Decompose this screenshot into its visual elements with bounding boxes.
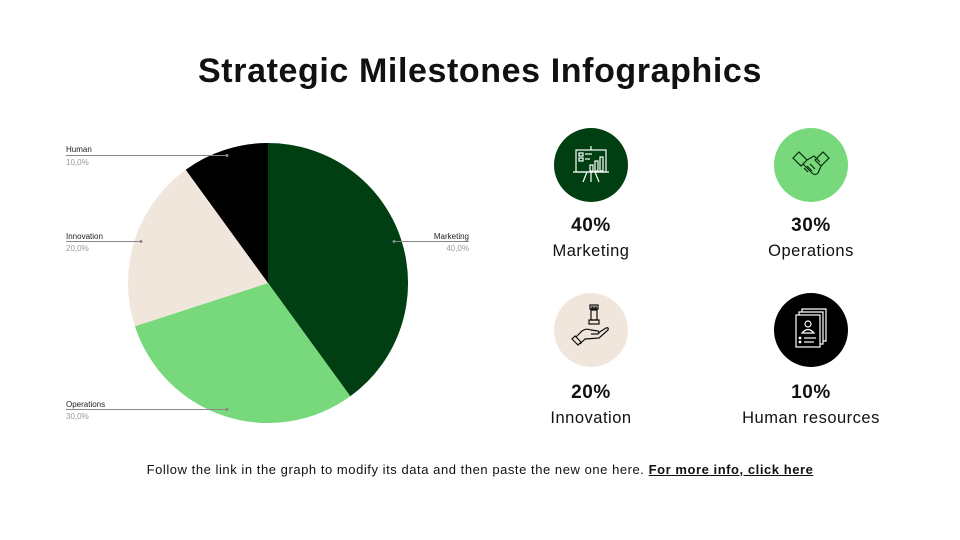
stat: operations: Operations (768, 242, 854, 260)
label: marketing: Marketing (434, 232, 469, 241)
stat: operations (768, 215, 854, 260)
label: human: 10,0% (66, 158, 89, 167)
slice: innovation (128, 170, 268, 326)
stat: human resources (742, 382, 880, 427)
footer note: Follow the link in the graph to modify its data and then paste the new one here. For more info, click here (147, 462, 813, 477)
label: innovation (66, 232, 142, 253)
label: operations: 30,0% (66, 412, 89, 421)
slice: operations (135, 283, 350, 423)
label: marketing (392, 232, 469, 253)
label: operations (66, 400, 228, 421)
label: marketing: 40,0% (446, 244, 469, 253)
pie chart (66, 143, 469, 423)
stat: marketing: 40% (571, 215, 611, 236)
title: Strategic Milestones Infographics (198, 52, 762, 90)
stat: marketing (553, 215, 629, 260)
label: human (66, 145, 228, 167)
label: operations: Operations (66, 400, 105, 409)
icon: operations handshake (774, 128, 848, 202)
icon: innovation hand with chess rook (554, 293, 628, 367)
stat: human resources: 10% (791, 382, 831, 403)
stat: marketing: Marketing (553, 242, 629, 260)
slice: human (186, 143, 268, 283)
icon: marketing presentation board (554, 128, 628, 202)
stat: human resources: Human resources (742, 409, 880, 427)
label: human: Human (66, 145, 92, 154)
slice: marketing (268, 143, 408, 396)
stat: innovation (550, 382, 632, 427)
stat: innovation: 20% (571, 382, 611, 403)
label: innovation: Innovation (66, 232, 103, 241)
stat: operations: 30% (791, 215, 831, 236)
icon: human resources profile card (774, 293, 848, 367)
stat: innovation: Innovation (550, 409, 632, 427)
label: innovation: 20,0% (66, 244, 89, 253)
